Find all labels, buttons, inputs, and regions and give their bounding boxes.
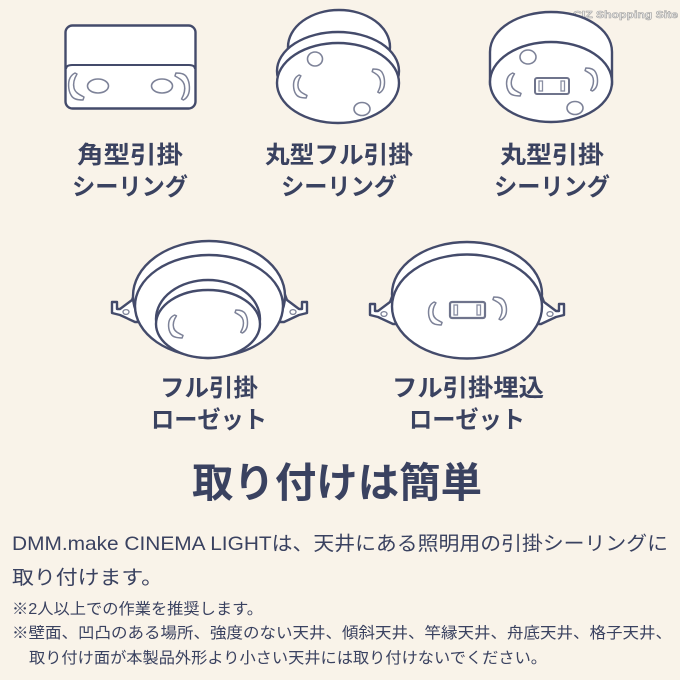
label: full hook recessed rosette: フル引掛埋込: [392, 375, 544, 402]
label: square ceiling: シーリング: [72, 173, 188, 201]
socket: [450, 302, 485, 318]
body text: [12, 533, 668, 589]
notes: 取り付け面が本製品外形より小さい天井には取り付けないでください。: [29, 649, 547, 667]
notes: ※壁面、凹凸のある場所、強度のない天井、傾斜天井、竿縁天井、舟底天井、格子天井、: [12, 624, 672, 642]
label: square ceiling: 角型引掛: [77, 142, 183, 169]
icon: round ceiling hook: [490, 12, 612, 122]
title: 取り付けは簡単: [192, 460, 482, 506]
notes: ※2人以上での作業を推奨します。: [12, 600, 263, 618]
icon: full hook rosette: [112, 241, 307, 358]
label: round ceiling: シーリング: [494, 173, 610, 201]
watermark: CIZ Shopping Site: [573, 9, 678, 21]
socket: [535, 78, 569, 94]
label: round ceiling: [494, 142, 610, 201]
label: full hook rosette: フル引掛: [160, 375, 258, 402]
label: full hook recessed rosette: ローゼット: [409, 406, 525, 434]
icon: full hook recessed rosette: [370, 242, 564, 358]
icon: square ceiling hook: [66, 26, 196, 108]
icon: round full ceiling hook: [277, 10, 399, 123]
label: full hook rosette: [151, 375, 267, 434]
notes: [12, 600, 672, 667]
label: full hook recessed rosette: [392, 375, 544, 434]
label: square ceiling: [72, 142, 188, 201]
body text: 取り付けます。: [12, 567, 163, 589]
label: round full ceiling: [265, 142, 413, 201]
label: full hook rosette: ローゼット: [151, 406, 267, 434]
label: round full ceiling: 丸型フル引掛: [265, 142, 413, 169]
body text: DMM.make CINEMA LIGHTは、天井にある照明用の引掛シーリングに: [12, 533, 668, 555]
label: round full ceiling: シーリング: [281, 173, 397, 201]
label: round ceiling: 丸型引掛: [500, 142, 604, 169]
